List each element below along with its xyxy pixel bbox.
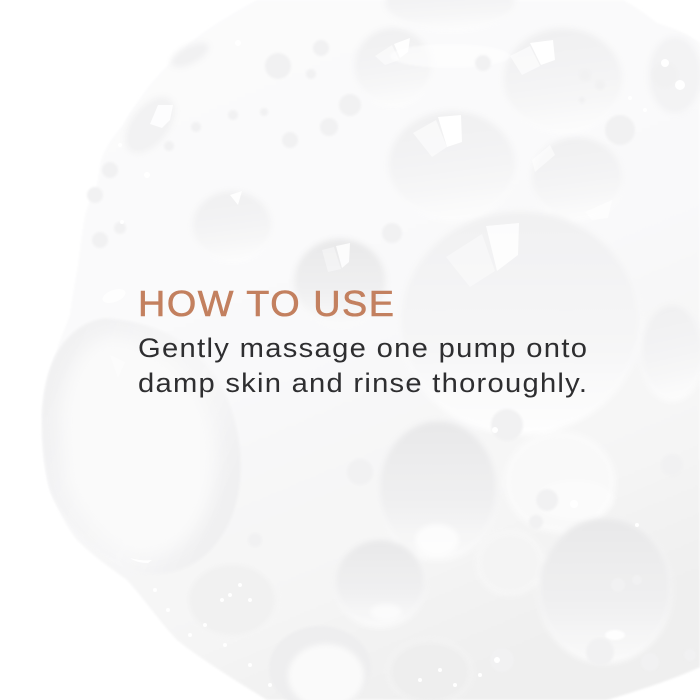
- heading: HOW TO USE: [138, 284, 394, 324]
- small foam bubbles: [87, 40, 696, 672]
- large clear bubble at left: [42, 318, 241, 574]
- instruction text: [138, 333, 587, 398]
- instruction text: damp skin and rinse thoroughly.: [138, 368, 587, 398]
- bubble at bottom edge: [269, 626, 371, 700]
- bright foam speckles: [118, 40, 685, 687]
- window reflections on bubbles: [101, 38, 625, 640]
- instruction text: Gently massage one pump onto: [138, 333, 587, 363]
